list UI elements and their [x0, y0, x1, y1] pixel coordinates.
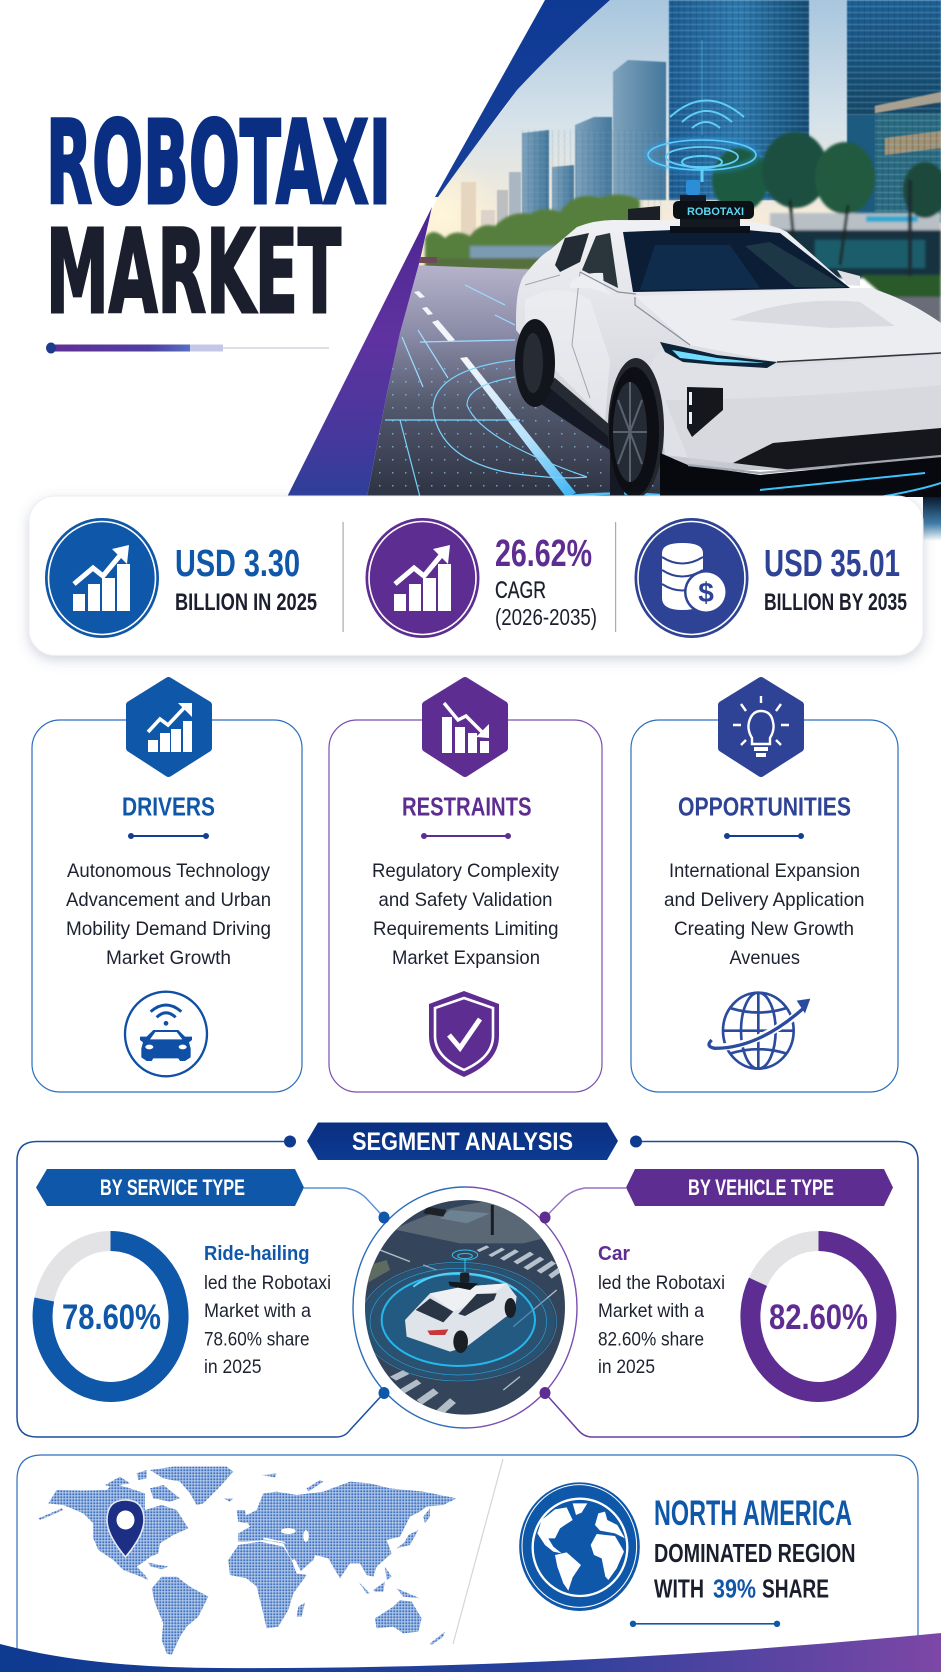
regional text: 39% [713, 1574, 756, 1604]
section heading: SEGMENT ANALYSIS [352, 1128, 573, 1156]
stat: forecast value [764, 543, 907, 616]
regional text: WITH [654, 1574, 704, 1604]
rule [630, 1621, 780, 1627]
donut chart: car [750, 1241, 886, 1392]
stat: CAGR: 26.62% [495, 533, 592, 575]
icon: connected car [125, 992, 207, 1076]
rear wheel [515, 319, 555, 407]
sky [360, 0, 941, 270]
regional text: SHARE [762, 1574, 829, 1604]
text: ride-hailing: 78.60% share [204, 1328, 310, 1350]
center photo: robotaxi at intersection [360, 1197, 570, 1420]
stat: base value [175, 543, 317, 616]
hood and door lines [580, 272, 690, 345]
body text: Advancement and Urban [66, 889, 271, 911]
icon: hexagon falling chart [426, 681, 504, 773]
title [46, 97, 391, 340]
text: car: Market with a [598, 1300, 704, 1322]
bumper [656, 378, 941, 463]
body text: Creating New Growth [674, 918, 854, 940]
text: car: in 2025 [598, 1356, 655, 1378]
panel: regional [17, 1455, 918, 1655]
text: ride-hailing: Market with a [204, 1300, 311, 1322]
rule [724, 833, 804, 839]
body text: and Safety Validation [378, 889, 552, 911]
icon: coins and dollar: $ [698, 577, 714, 608]
sill [550, 378, 610, 438]
body text [664, 860, 864, 969]
regional text [654, 1494, 856, 1604]
panel: segment analysis [17, 1122, 918, 1437]
car body [516, 220, 941, 470]
body text: Mobility Demand Driving [66, 918, 271, 940]
light arcs under car [760, 473, 941, 497]
text: ride-hailing: led the Robotaxi [204, 1272, 331, 1294]
body text: Market Expansion [392, 947, 540, 969]
title line 2: MARKET [46, 206, 341, 340]
windshield [623, 230, 850, 292]
street trees and far wall [425, 132, 941, 325]
hood [635, 288, 941, 362]
small car [405, 1283, 517, 1352]
banner: by vehicle type [626, 1169, 893, 1206]
roof sensor unit [628, 206, 660, 220]
donut chart: ride-hailing [43, 1241, 179, 1392]
text: car: led the Robotaxi [598, 1272, 725, 1294]
fog lamp housing [687, 387, 723, 437]
hero photo: autonomous taxi on a city road [340, 0, 941, 541]
panel: opportunities [631, 681, 898, 1092]
heading: RESTRAINTS [402, 794, 532, 822]
stat: base value: USD 3.30 [175, 543, 300, 585]
icon: location pin [107, 1500, 144, 1557]
road [367, 265, 673, 496]
front wheel [608, 358, 664, 498]
body text [372, 860, 559, 969]
body text: and Delivery Application [664, 889, 864, 911]
diagonal band: blue [435, 0, 610, 197]
icon: rising chart, purple [366, 518, 480, 638]
headlight [660, 342, 777, 368]
icon: hexagon rising chart [130, 681, 208, 773]
section banner [307, 1122, 618, 1160]
text: car: Car [598, 1243, 630, 1265]
title rule [46, 342, 329, 354]
regional text: DOMINATED REGION [654, 1538, 856, 1568]
panel: restraints [329, 681, 602, 1092]
panel outline [17, 1142, 918, 1437]
door reflection [546, 324, 610, 420]
panel: key stats [29, 496, 923, 656]
lower bumper [660, 453, 941, 497]
text: ride-hailing: Ride-hailing [204, 1243, 310, 1265]
icon: shield with check [429, 991, 499, 1077]
stat: CAGR: CAGR [495, 577, 546, 604]
panel: drivers [32, 681, 302, 1092]
donut value: 78.60% [62, 1298, 161, 1337]
icon: rising chart, blue [45, 518, 159, 638]
rule [128, 833, 209, 839]
connector dots [378, 1212, 550, 1399]
dotted world map [38, 1467, 457, 1655]
text: car [598, 1243, 725, 1378]
signal rings above car [647, 40, 757, 182]
skyline towers [461, 0, 941, 240]
footer wave [0, 1633, 941, 1672]
heading: DRIVERS [122, 794, 215, 822]
rule [421, 833, 511, 839]
text: ride-hailing: in 2025 [204, 1356, 262, 1378]
banner: by service type [36, 1169, 304, 1206]
icon: globe badge [519, 1482, 640, 1611]
body text [66, 860, 271, 969]
body text: Requirements Limiting [373, 918, 558, 940]
icon: coins and dollar [634, 518, 748, 638]
heading: OPPORTUNITIES [678, 794, 851, 822]
icon: globe with arrow [709, 993, 810, 1069]
donut value: 82.60% [769, 1298, 868, 1337]
body text: Avenues [730, 947, 800, 969]
title line 1: ROBOTAXI [46, 97, 391, 231]
stat: base value: BILLION IN 2025 [175, 589, 317, 616]
side mirrors [578, 272, 604, 288]
body text: International Expansion [669, 860, 860, 882]
icon: hexagon lightbulb [722, 681, 800, 773]
car shadow [535, 378, 625, 497]
text: ride-hailing [204, 1243, 331, 1378]
road markings [385, 285, 680, 497]
body text: Market Growth [106, 947, 231, 969]
body text: Regulatory Complexity [372, 860, 559, 882]
stat: CAGR [495, 533, 597, 630]
body text: Autonomous Technology [67, 860, 270, 882]
side windows [555, 233, 589, 272]
roof display text: ROBOTAXI [687, 206, 744, 218]
stat: CAGR: (2026-2035) [495, 604, 597, 630]
grille [733, 428, 941, 470]
diagonal band: purple [287, 207, 432, 497]
banner: by vehicle type: BY VEHICLE TYPE [688, 1175, 834, 1200]
banner: by service type: BY SERVICE TYPE [100, 1175, 245, 1200]
text: car: 82.60% share [598, 1328, 704, 1350]
connectors [304, 1187, 626, 1428]
